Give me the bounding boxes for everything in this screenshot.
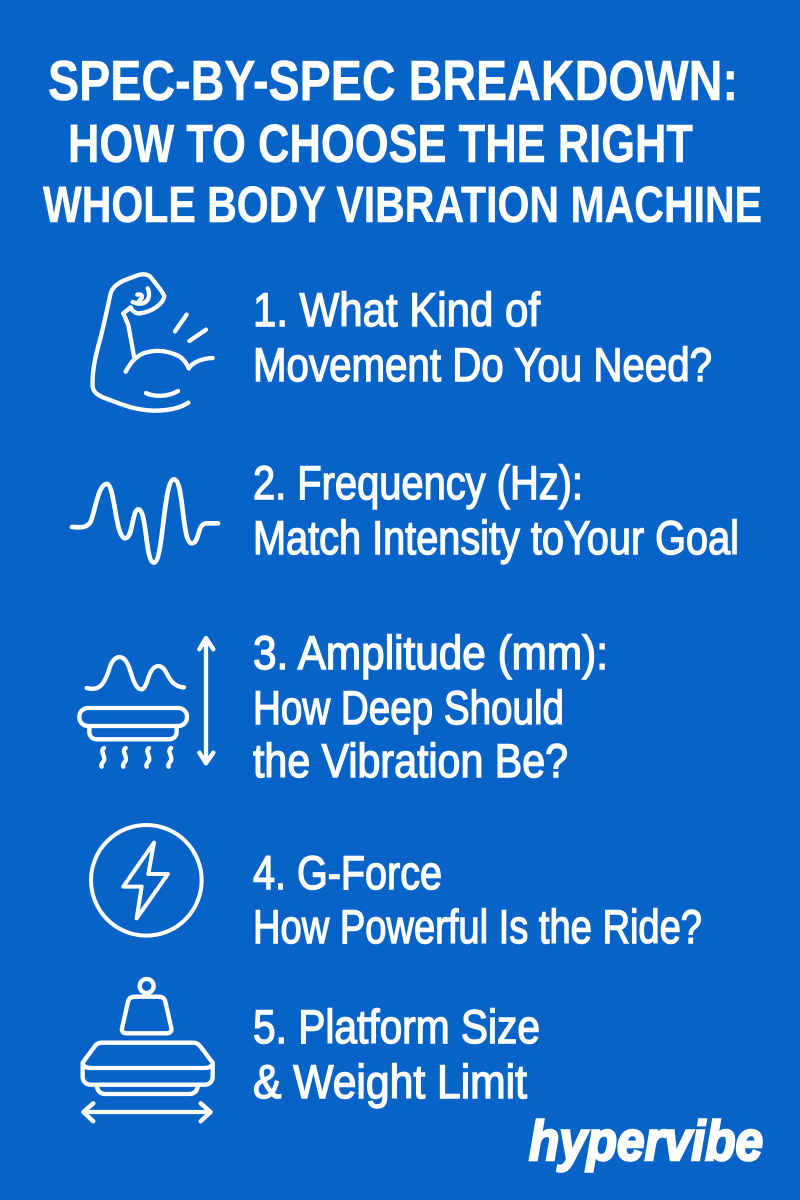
heading: item 1: 1. What Kind of xyxy=(253,283,541,336)
icon: weight on platform xyxy=(83,979,213,1121)
heading: item 2 xyxy=(253,456,739,564)
heading: item 5 xyxy=(253,1000,540,1108)
heading: item 4 xyxy=(253,846,702,953)
heading: item 3: How Deep Should xyxy=(253,681,564,734)
heading: item 4: 4. G-Force xyxy=(253,846,442,899)
heading: item 2: 2. Frequency (Hz): xyxy=(253,456,583,509)
heading: item 4: How Powerful Is the Ride? xyxy=(253,900,702,953)
title xyxy=(43,49,762,233)
heading: item 5: 5. Platform Size xyxy=(253,1000,540,1053)
icon: vibration wave xyxy=(72,479,218,563)
heading: item 3 xyxy=(253,626,608,787)
heading: item 5: & Weight Limit xyxy=(253,1055,527,1108)
heading: item 3: the Vibration Be? xyxy=(253,734,568,787)
icon: amplitude platform xyxy=(79,638,213,767)
icon: flexed arm xyxy=(93,274,213,411)
icon: lightning in circle xyxy=(91,825,202,936)
logo: hypervibe: hypervibe xyxy=(529,1109,763,1172)
heading: item 3: 3. Amplitude (mm): xyxy=(253,626,608,679)
heading: item 1 xyxy=(253,283,712,391)
heading: item 1: Movement Do You Need? xyxy=(253,338,712,391)
